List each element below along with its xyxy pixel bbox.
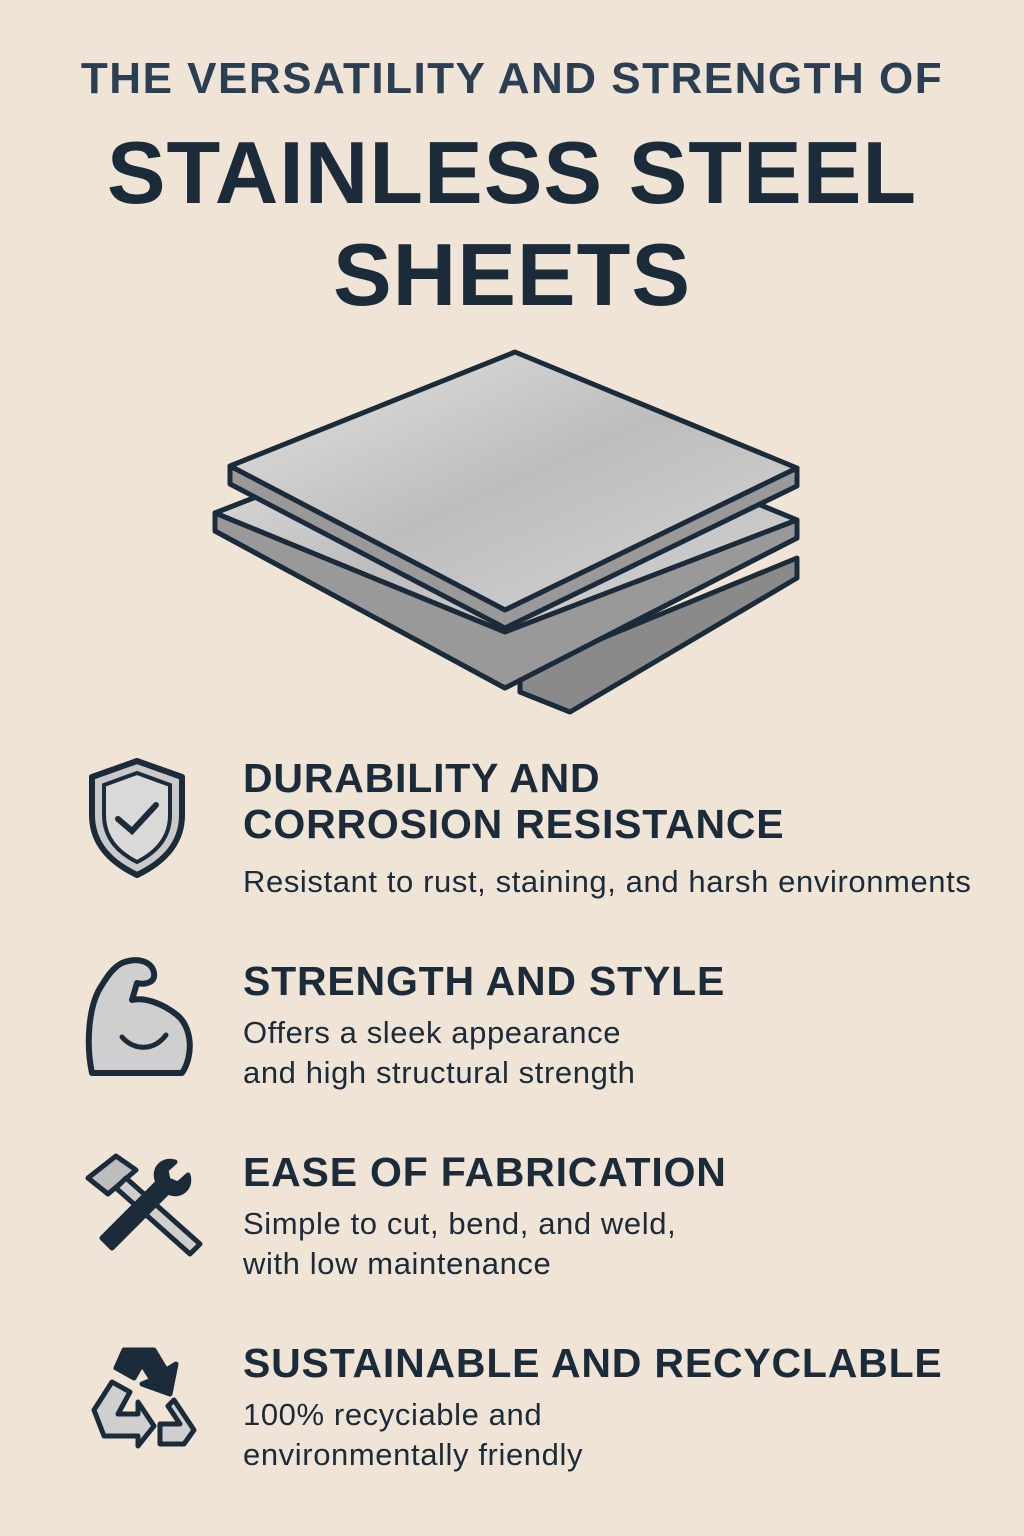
text: fabrication: [243, 1206, 676, 1281]
text: sustainable: environmentally friendly: [243, 1437, 583, 1472]
icon: recycle: [92, 1348, 196, 1448]
middle sheet: [215, 400, 797, 688]
text: strength: Offers a sleek appearance: [243, 1015, 621, 1050]
icon: hammer and wrench: [86, 1154, 202, 1256]
title main: STAINLESS STEEL: [107, 123, 917, 222]
icon: muscle arm: [86, 957, 193, 1076]
title main: SHEETS: [333, 225, 691, 324]
text: fabrication: Simple to cut, bend, and weld,: [243, 1206, 676, 1241]
text: fabrication: with low maintenance: [243, 1246, 551, 1281]
bottom sheet: [520, 558, 797, 712]
heading: fabrication: EASE OF FABRICATION: [243, 1149, 727, 1195]
illustration: stacked steel sheets: [212, 350, 800, 714]
text: sustainable: [243, 1397, 583, 1472]
title line 1: THE VERSATILITY AND STRENGTH OF: [81, 54, 943, 103]
text: durability: Resistant to rust, staining, and harsh environments: [243, 864, 971, 899]
text: sustainable: 100% recyciable and: [243, 1397, 542, 1432]
icon: shield: [89, 758, 185, 878]
heading: durability: [243, 755, 784, 847]
title main: [107, 123, 917, 324]
text: strength: and high structural strength: [243, 1055, 635, 1090]
text: strength: [243, 1015, 635, 1090]
heading: sustainable: SUSTAINABLE AND RECYCLABLE: [243, 1340, 943, 1386]
heading: durability: DURABILITY AND: [243, 755, 600, 801]
heading: strength: STRENGTH AND STYLE: [243, 958, 725, 1004]
heading: durability: CORROSION RESISTANCE: [243, 801, 784, 847]
top sheet: [230, 352, 797, 610]
